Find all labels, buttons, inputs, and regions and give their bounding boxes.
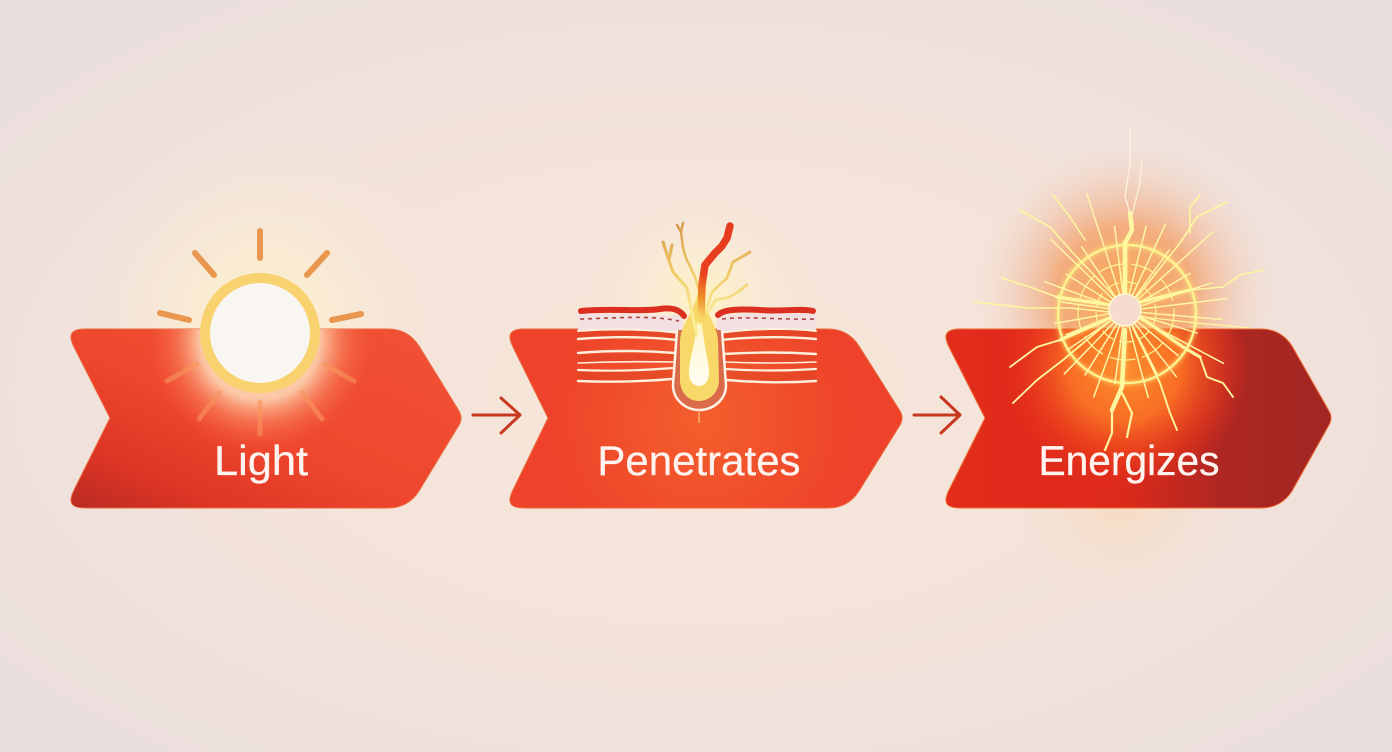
arrow: Light to Penetrates	[473, 398, 520, 433]
label: Light: Light	[214, 437, 308, 484]
red surface band	[581, 308, 813, 316]
light core	[689, 300, 709, 386]
panel: Energizes	[946, 127, 1331, 508]
red main tendril	[701, 226, 730, 320]
chevron: Light	[71, 329, 461, 508]
follicle	[673, 330, 726, 410]
chevron: Penetrates	[510, 329, 902, 508]
burst glow lines	[1057, 243, 1196, 387]
dermis shading	[578, 331, 816, 381]
panel: Light	[71, 225, 461, 508]
label: Energizes: Energizes	[1038, 437, 1220, 484]
burst core	[1109, 294, 1141, 326]
icon: skin cross-section	[578, 223, 816, 423]
panel: Penetrates	[510, 223, 902, 508]
glow: background halos	[50, 120, 1285, 600]
icon: sun rays	[160, 231, 361, 434]
sun glow on chevron	[158, 329, 360, 443]
skin layers	[578, 313, 683, 333]
icon: sun disc	[205, 278, 315, 388]
dotted layer line	[580, 317, 816, 321]
lightning branches	[975, 127, 1263, 450]
label: Penetrates: Penetrates	[597, 437, 801, 484]
arrow: Penetrates to Energizes	[914, 397, 960, 433]
icon: energy burst	[975, 127, 1263, 450]
orange glow on chevron	[1013, 329, 1243, 470]
chevron: Energizes	[946, 329, 1331, 508]
thin tendrils	[663, 223, 750, 335]
radial spokes	[1044, 193, 1228, 398]
dermis lines	[578, 329, 816, 382]
rings	[1058, 245, 1196, 383]
